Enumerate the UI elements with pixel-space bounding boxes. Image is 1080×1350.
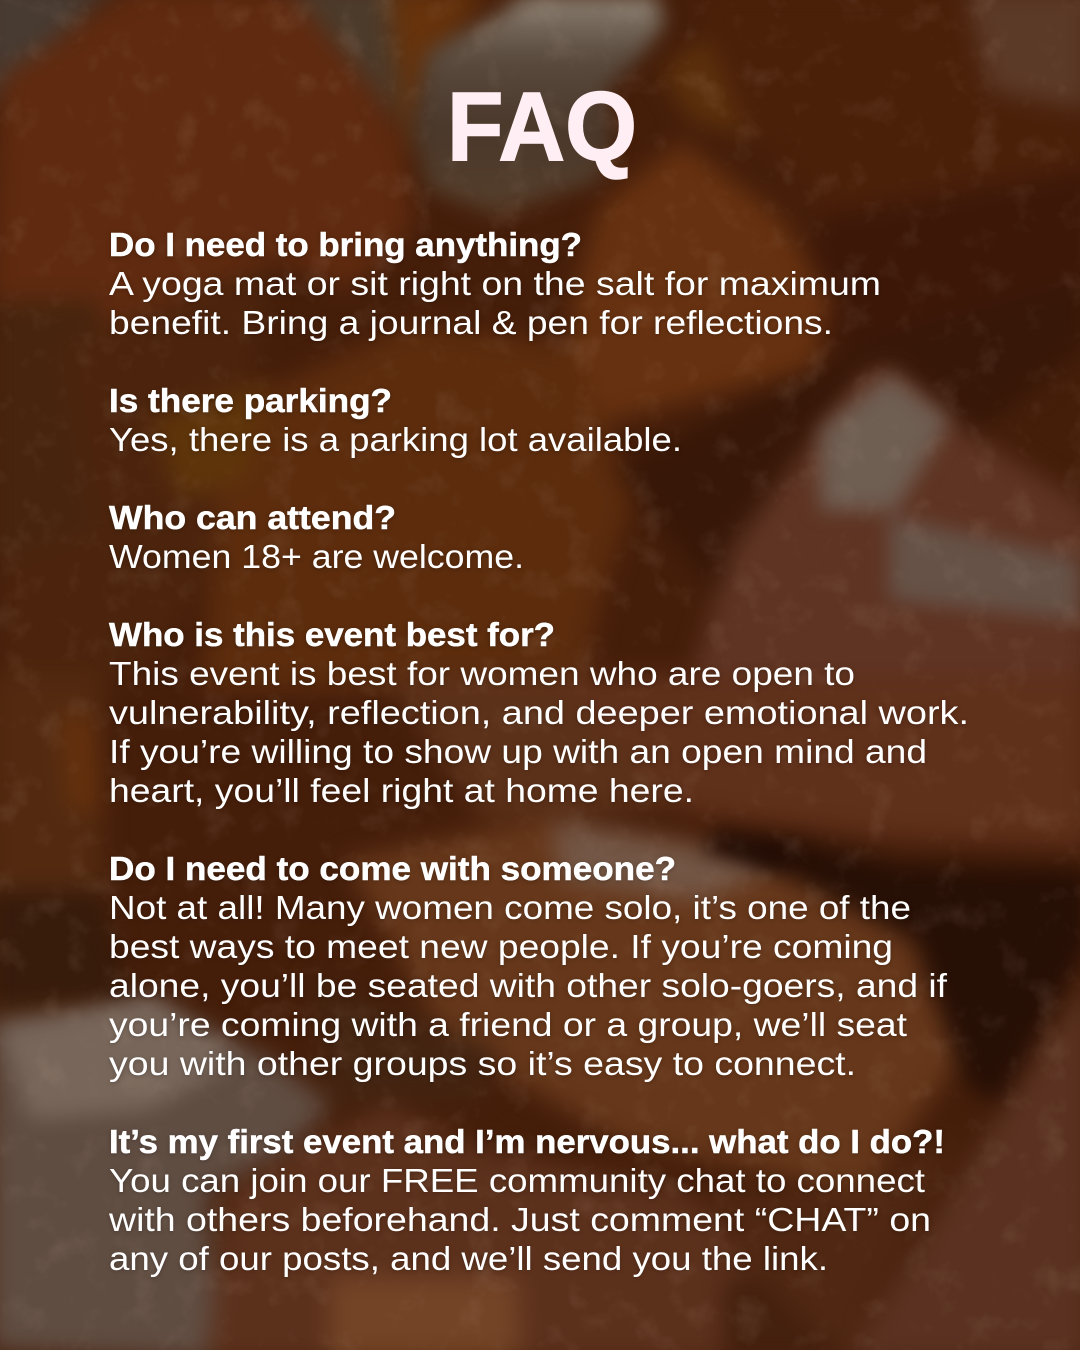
faq: do I need to come with someone: alone, you’ll be seated with other solo-goers, and if [109, 967, 948, 1004]
faq: do I need to bring anything: Do I need to bring anything? [109, 226, 582, 263]
faq: who is this event best for: If you’re willing to show up with an open mind and [109, 733, 927, 770]
faq: parking: Yes, there is a parking lot available. [109, 421, 682, 458]
faq: do I need to come with someone [109, 850, 948, 1082]
faq: parking: Is there parking? [109, 382, 392, 419]
faq: do I need to bring anything [109, 226, 881, 341]
title: FAQ [447, 72, 637, 181]
faq: first event nerves: You can join our FREE community chat to connect [109, 1162, 925, 1199]
faq: who can attend [109, 499, 524, 575]
faq: do I need to come with someone: you’re coming with a friend or a group, we’ll seat [109, 1006, 907, 1043]
faq: who can attend: Women 18+ are welcome. [109, 538, 524, 575]
faq: do I need to come with someone: you with other groups so it’s easy to connect. [109, 1045, 856, 1082]
faq: first event nerves: with others beforehand. Just comment “CHAT” on [108, 1201, 931, 1238]
faq: first event nerves: It’s my first event and I’m nervous... what do I do?! [109, 1123, 945, 1160]
faq: who is this event best for: vulnerability, reflection, and deeper emotional work. [109, 694, 969, 731]
faq: do I need to bring anything: A yoga mat or sit right on the salt for maximum [109, 265, 881, 302]
faq: parking [109, 382, 682, 458]
faq: who is this event best for: Who is this event best for? [109, 616, 555, 653]
faq: do I need to come with someone: Not at all! Many women come solo, it’s one of the [109, 889, 911, 926]
faq: first event nerves [108, 1123, 945, 1277]
faq: do I need to come with someone: Do I need to come with someone? [109, 850, 676, 887]
faq: who is this event best for: heart, you’ll feel right at home here. [109, 772, 694, 809]
faq: who is this event best for: This event is best for women who are open to [109, 655, 855, 692]
faq: who is this event best for [109, 616, 969, 809]
faq: do I need to come with someone: best ways to meet new people. If you’re coming [109, 928, 893, 965]
faq: who can attend: Who can attend? [109, 499, 396, 536]
faq: do I need to bring anything: benefit. Bring a journal & pen for reflections. [109, 304, 833, 341]
faq: first event nerves: any of our posts, and we’ll send you the link. [109, 1240, 828, 1277]
